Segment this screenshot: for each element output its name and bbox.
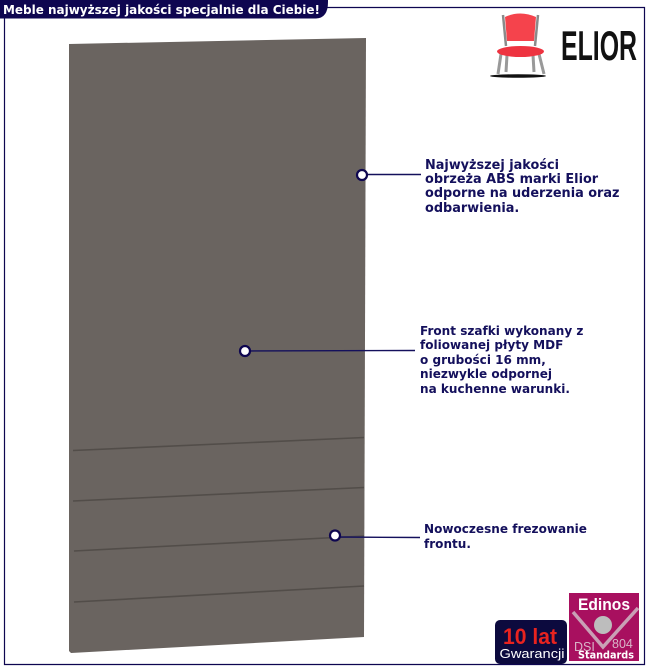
- cabinet front panel: [69, 38, 366, 653]
- callout: MDF front: o grubości 16 mm,: [420, 353, 546, 367]
- callout: MDF front: foliowanej płyty MDF: [420, 338, 563, 352]
- callout: ABS edge: odporne na uderzenia oraz: [425, 186, 620, 201]
- callout: milling: [330, 522, 587, 551]
- callout: milling: frontu.: [424, 537, 471, 551]
- callout: ABS edge: [357, 158, 620, 216]
- callout: MDF front: Front szafki wykonany z: [420, 324, 583, 338]
- icon: red chair: [490, 14, 546, 78]
- badge: 10 lat warranty: 10 lat: [503, 624, 558, 649]
- milled grooves: [73, 438, 364, 602]
- callout: milling: Nowoczesne frezowanie: [424, 522, 587, 536]
- badge: Edinos standards: Standards: [578, 650, 634, 662]
- callout: MDF front: niezwykle odpornej: [420, 367, 552, 381]
- title banner: Meble najwyższej jakości specjalnie dla Ciebie!: [3, 3, 320, 17]
- callout: ABS edge: odbarwienia.: [425, 201, 519, 216]
- callout: MDF front: na kuchenne warunki.: [420, 382, 570, 396]
- callout: ABS edge: obrzeża ABS marki Elior: [425, 172, 599, 187]
- callout: MDF front: [240, 324, 583, 396]
- badge: Edinos standards: [569, 593, 639, 662]
- badge: Edinos standards: DSI: [574, 640, 595, 654]
- badge: 10 lat warranty: [495, 620, 567, 664]
- callout: ABS edge: Najwyższej jakości: [425, 158, 559, 173]
- badge: Edinos standards: 804: [612, 637, 633, 651]
- badge: Edinos standards: Edinos: [578, 595, 630, 614]
- badge: 10 lat warranty: Gwarancji: [500, 646, 565, 661]
